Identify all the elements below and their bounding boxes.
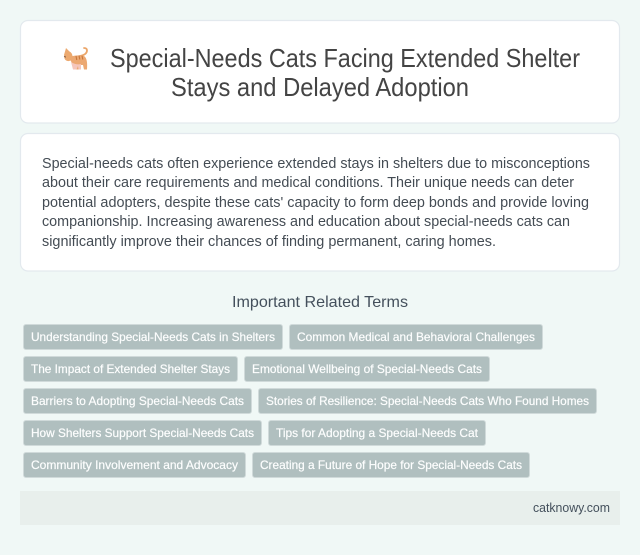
tag: Tips for Adopting a Special-Needs Cat <box>276 426 479 440</box>
tag: Creating a Future of Hope for Special-Needs Cats <box>260 458 522 472</box>
tag: Understanding Special-Needs Cats in Shelters <box>31 330 275 344</box>
tag <box>24 324 282 350</box>
tag: Barriers to Adopting Special-Needs Cats <box>31 394 244 408</box>
title: Special-Needs Cats Facing Extended Shelter <box>110 45 580 73</box>
tag <box>290 324 542 350</box>
icon: cat <box>64 48 87 70</box>
description text: companionship. Increasing awareness and education about special-needs cats can <box>42 214 570 230</box>
description text: about their care requirements and medical conditions. Their unique needs can deter <box>42 175 574 191</box>
panel: description <box>20 134 620 271</box>
tag <box>24 388 252 414</box>
tag: Common Medical and Behavioral Challenges <box>297 330 535 344</box>
tag <box>258 388 596 414</box>
tag <box>24 420 262 446</box>
footer <box>20 491 620 525</box>
tag <box>24 356 238 382</box>
tag <box>244 356 490 382</box>
tag <box>268 420 486 446</box>
title: Stays and Delayed Adoption <box>171 74 469 102</box>
description text <box>42 156 590 250</box>
heading: related terms: Important Related Terms <box>232 294 408 311</box>
panel: title card <box>20 20 620 123</box>
footer source: catknowy.com <box>533 500 610 515</box>
tag: How Shelters Support Special-Needs Cats <box>31 426 254 440</box>
tag: Emotional Wellbeing of Special-Needs Cats <box>252 362 482 376</box>
tag <box>252 452 530 478</box>
description text: Special-needs cats often experience extended stays in shelters due to misconceptions <box>42 156 590 172</box>
tag <box>24 452 246 478</box>
description text: potential adopters, despite these cats' capacity to form deep bonds and provide loving <box>42 195 589 211</box>
title <box>110 45 580 102</box>
tag: Stories of Resilience: Special-Needs Cats Who Found Homes <box>266 394 589 408</box>
tag: The Impact of Extended Shelter Stays <box>31 362 230 376</box>
tag list <box>24 324 596 478</box>
description text: significantly improve their chances of finding permanent, caring homes. <box>42 234 496 250</box>
tag: Community Involvement and Advocacy <box>31 458 238 472</box>
